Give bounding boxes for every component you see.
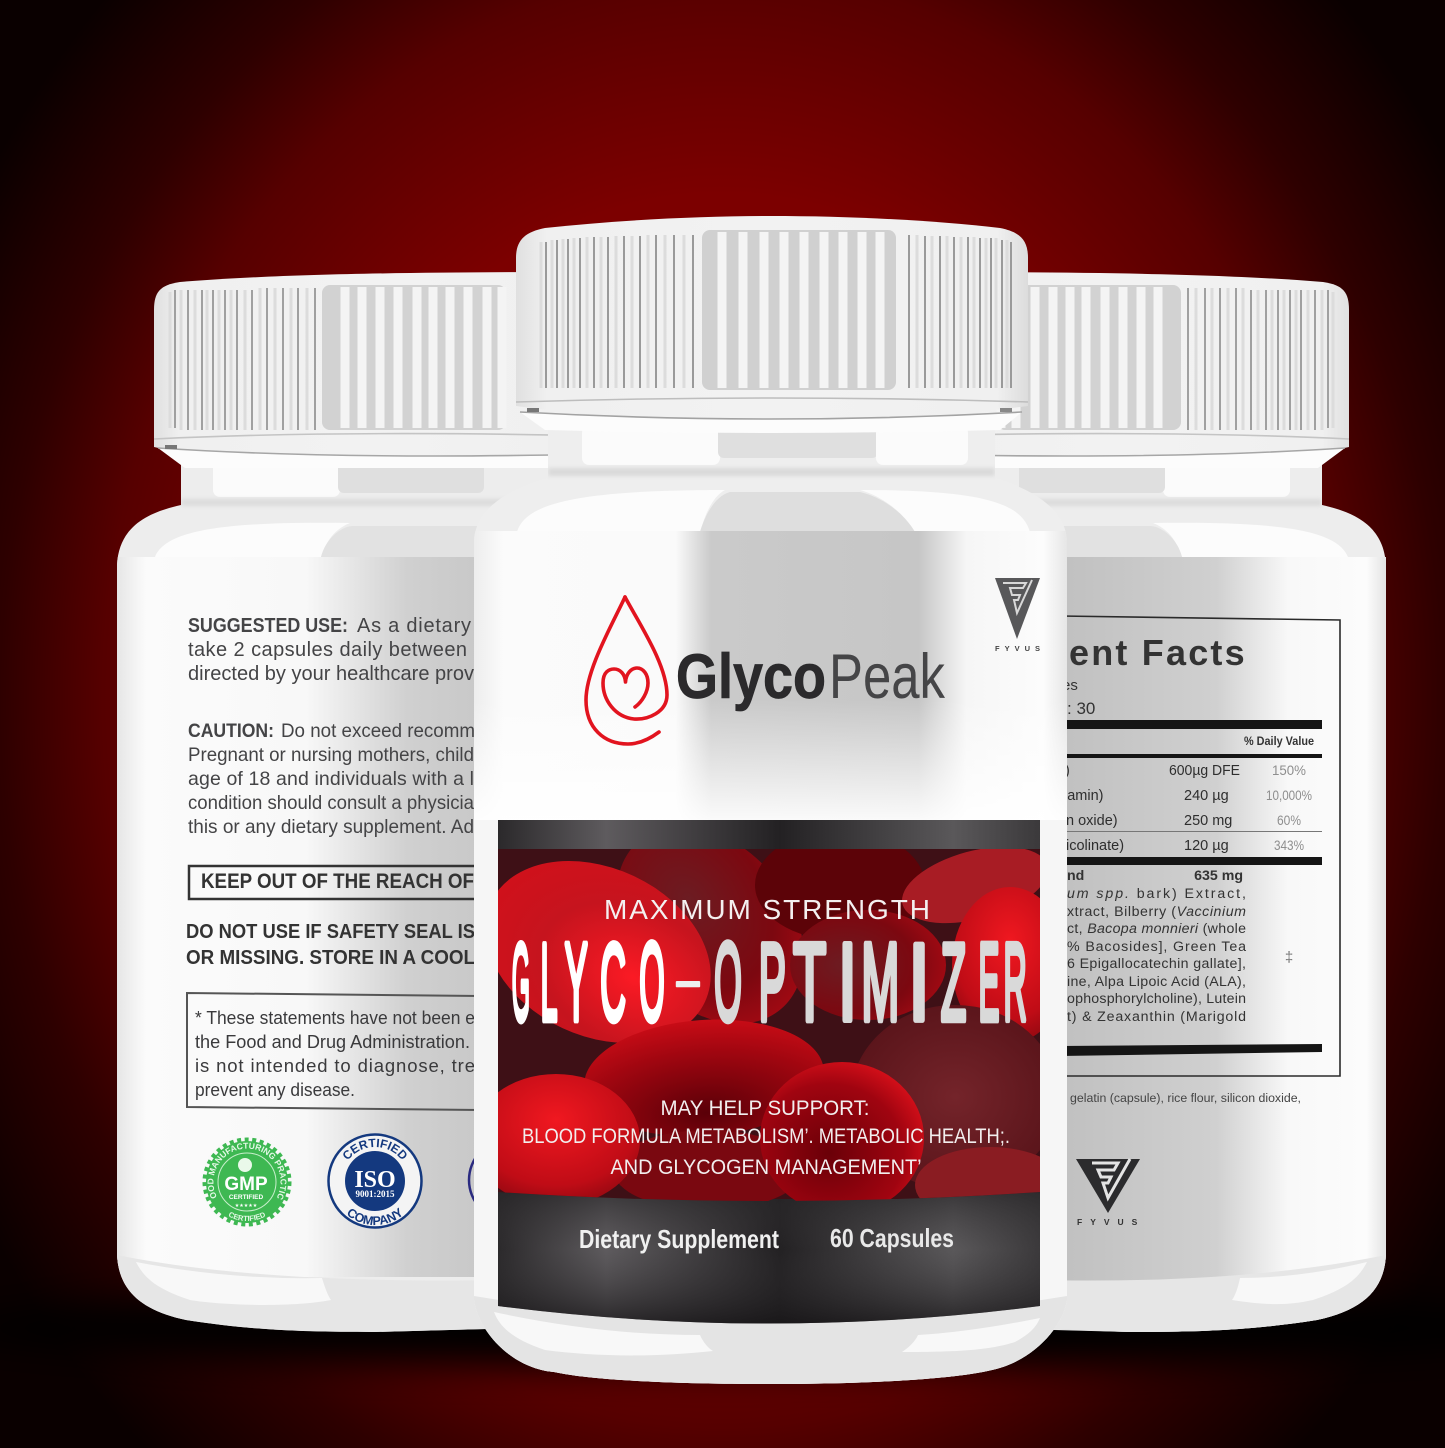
caution text: Do not exceed recomm [281,720,475,742]
proprietary blend ingredients: 635 mg [1194,868,1243,884]
right bottle base highlight [1232,1262,1367,1304]
proprietary blend ingredients: nd [1067,868,1084,884]
brand wordmark [676,642,945,712]
suggested use text: SUGGESTED USE: [188,615,348,637]
proprietary blend ingredients [1067,868,1293,1025]
OPTIMIZER: T [793,921,826,1044]
proprietary blend ingredients: t) & Zeaxanthin (Marigold [1067,1009,1246,1025]
serving info: es [1062,677,1078,694]
may help support claims: MAY HELP SUPPORT: [660,1097,870,1120]
OPTIMIZER: I [908,921,930,1044]
daily value header: % Daily Value [1244,734,1314,748]
proprietary blend ingredients: xtract, Bilberry (Vaccinium [1067,904,1246,920]
caution text [188,720,475,838]
front bottle shell with neck and shoulder [474,410,1067,1390]
right bottle: supplement facts panel [903,272,1386,1335]
brand wordmark: Glyco [676,642,826,712]
disclaimer box: is not intended to diagnose, tre [195,1055,475,1076]
GLYCO: C [600,922,626,1044]
proprietary blend ingredients: um spp. bark) Extract, [1067,886,1246,902]
proprietary blend ingredients: % Bacosides], Green Tea [1067,939,1246,955]
right bottle cap [903,272,1349,468]
badge: GMP certified: ★★★★★ [235,1203,258,1209]
badge: GMP certified: GOOD MANUFACTURING PRACTICE [208,1142,286,1200]
badge: ISO 9001:2015 [327,1133,423,1229]
nutrient rows: icolinate) [1066,838,1124,854]
suggested use text [188,615,474,685]
OPTIMIZER [714,921,1027,1044]
badge: ISO 9001:2015: ISO [354,1167,396,1193]
icon: FYVUS logo on right bottle [1076,1159,1145,1227]
caution text: age of 18 and individuals with a l [188,768,474,790]
left bottle: back panel with usage text [117,272,596,1332]
icon: blood drop with heart [586,597,667,744]
suggested use text: take 2 capsules daily between [188,639,467,661]
brand logo: GlycoPeak [586,597,945,744]
do not use warning: OR MISSING. STORE IN A COOL [186,946,475,969]
maximum strength heading: MAXIMUM STRENGTH [604,894,930,925]
caution text: condition should consult a physicia [188,792,474,814]
badge: GMP certified: CERTIFIED [229,1212,265,1221]
icon: FYVUS logo: FYVUS [995,644,1045,653]
OPTIMIZER: M [861,921,899,1044]
badge: ISO 9001:2015: COMPANY [348,1208,402,1226]
capsule count: 60 Capsules [830,1223,954,1253]
badge: ISO 9001:2015: CERTIFIED [343,1138,406,1159]
front bottle cap [516,216,1028,433]
product label [498,820,1040,1324]
icon: FYVUS logo [995,578,1045,653]
nutrient rows: 60% [1277,813,1301,828]
hyphen: - [673,947,703,1013]
nutrient rows [1064,763,1312,854]
GLYCO: G [512,920,530,1044]
disclaimer box: * These statements have not been e [195,1007,475,1028]
supplement facts frame [1060,616,1340,1076]
nutrient rows: n oxide) [1066,813,1118,829]
may help support claims: AND GLYCOGEN MANAGEMENT’ [610,1156,922,1179]
caution text: CAUTION: [188,720,274,742]
product name [512,920,1027,1045]
proprietary blend ingredients: 6 Epigallocatechin gallate], [1067,956,1246,972]
left bottle shell [117,465,548,1332]
nutrient rows: 600µg DFE [1169,763,1240,779]
nutrient rows: 240 µg [1184,788,1229,804]
GLYCO: O [639,922,665,1044]
OPTIMIZER: Z [941,921,966,1044]
nutrient rows: 250 mg [1184,813,1232,829]
brand wordmark: Peak [829,642,945,712]
badge: ISO 9001:2015: 9001:2015 [356,1189,395,1199]
proprietary blend ingredients: ‡ [1285,949,1293,966]
dietary supplement text: Dietary Supplement [579,1224,779,1254]
GLYCO: L [541,922,557,1045]
badge: partially hidden third seal [469,1139,551,1221]
OPTIMIZER: P [759,921,786,1044]
serving info [1062,677,1095,718]
proprietary blend ingredients: ine, Alpa Lipoic Acid (ALA), [1067,974,1246,990]
caution text: Pregnant or nursing mothers, child [188,744,474,766]
serving info: : 30 [1067,699,1095,718]
disclaimer box: the Food and Drug Administration. [195,1031,470,1052]
suggested use text: As a dietary [357,615,471,637]
OPTIMIZER: E [978,922,999,1044]
disclaimer box [187,993,480,1110]
nutrient rows: 10,000% [1266,788,1312,803]
OPTIMIZER: O [714,922,742,1044]
keep out of reach box: KEEP OUT OF THE REACH OF [201,870,474,893]
GLYCO [512,920,665,1045]
badge: GMP certified [202,1138,292,1226]
nutrient rows: 343% [1274,838,1304,853]
badge: GMP certified: GMP [224,1174,268,1195]
front bottle: main product [456,216,1068,1390]
nutrient rows: ) [1065,763,1070,779]
do not use warning [186,920,475,969]
nutrient rows: lamin) [1064,788,1103,804]
label top band [498,820,1040,850]
OPTIMIZER: I [838,921,857,1044]
proprietary blend ingredients: ophosphorylcholine), Lutein [1067,991,1246,1007]
icon: FYVUS logo on right bottle: FYVUS [1077,1217,1145,1227]
proprietary blend ingredients: ct, Bacopa monnieri (whole [1067,921,1246,937]
may help support claims [522,1097,1010,1179]
suggested use text: directed by your healthcare prov [188,663,474,685]
right bottle body [960,557,1386,1332]
nutrient rows: 150% [1272,763,1306,778]
supplement facts heading: ent Facts [1069,632,1247,673]
thick divider bars [1060,720,1322,1056]
label bottom band [498,1188,1040,1324]
caution text: this or any dietary supplement. Ad [188,816,474,838]
GLYCO: Y [565,921,588,1044]
blood cell artwork [498,849,1040,1201]
badge: GMP certified: CERTIFIED [229,1194,263,1201]
do not use warning: DO NOT USE IF SAFETY SEAL IS [186,920,475,943]
may help support claims: BLOOD FORMULA METABOLISM’. METABOLIC HEALTH;. [522,1125,1010,1148]
keep out of reach box [189,866,480,899]
nutrient rows: 120 µg [1184,838,1229,854]
left bottle cap [154,272,600,468]
disclaimer box: prevent any disease. [195,1079,355,1100]
right bottle base [960,1255,1386,1332]
other ingredients: gelatin (capsule), rice flour, silicon dioxide, [1070,1091,1301,1105]
right bottle shell [995,465,1386,1332]
OPTIMIZER: R [1004,922,1027,1044]
